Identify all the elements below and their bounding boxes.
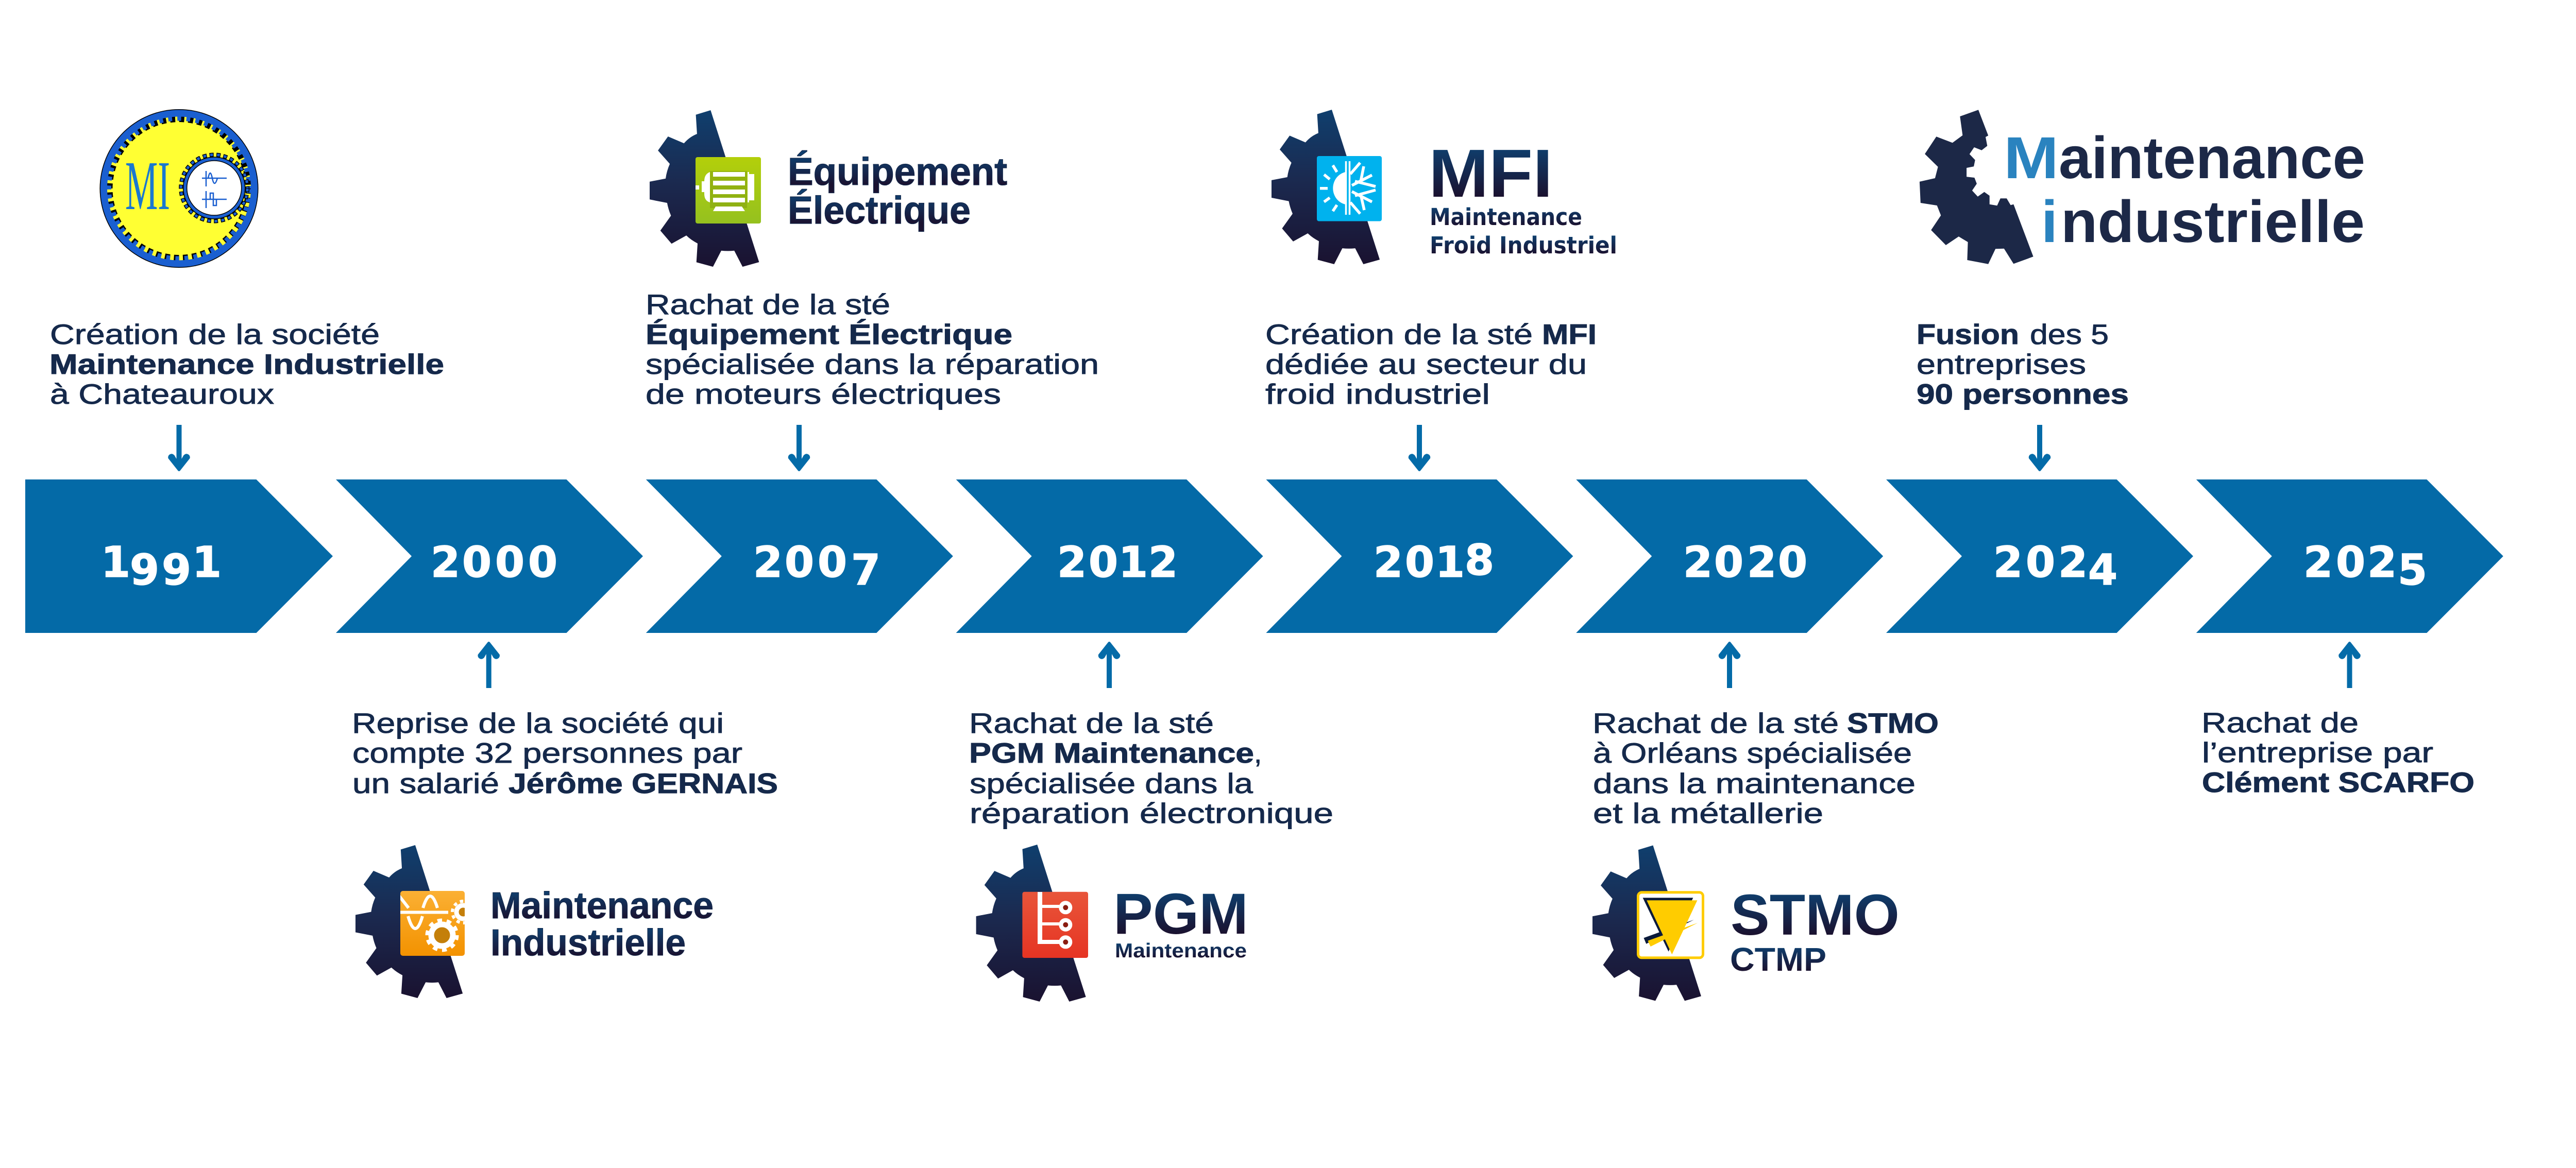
logo text: Électrique bbox=[788, 188, 971, 232]
logo text: M bbox=[2004, 125, 2059, 191]
text: 2000 bbox=[352, 707, 778, 799]
logo text: CTMP bbox=[1730, 941, 1826, 978]
text: 2000: Jérôme GERNAIS bbox=[509, 767, 778, 799]
logo text: Industrielle bbox=[490, 922, 686, 964]
icon: gear bbox=[355, 845, 463, 998]
text: 2007: Rachat de la sté bbox=[646, 288, 890, 320]
text: 2025: Rachat de bbox=[2201, 707, 2359, 738]
logo text: Maintenance bbox=[1115, 940, 1247, 962]
text: 2025: Clément SCARFO bbox=[2202, 766, 2475, 798]
chevron: 2007 bbox=[646, 479, 953, 633]
arrow: 2024 bbox=[2029, 425, 2050, 471]
text: 2000: Reprise de la société qui bbox=[352, 707, 724, 739]
text: 2012 bbox=[969, 707, 1333, 829]
logo text: Équipement bbox=[788, 150, 1007, 193]
icon: circuit bbox=[1022, 892, 1088, 958]
arrow: 2020 bbox=[1719, 642, 1740, 688]
text: 2020: Rachat de la sté bbox=[1592, 707, 1839, 739]
logo: Équipement Électrique bbox=[650, 110, 1007, 267]
logo text bbox=[788, 150, 1007, 232]
text: 2007 bbox=[646, 288, 1099, 410]
text: 2024: des 5 bbox=[2030, 318, 2109, 350]
text: 1991 bbox=[49, 318, 444, 410]
arrow: 2025 bbox=[2338, 642, 2361, 688]
chevron: 2020 bbox=[1576, 479, 1883, 633]
text: 2020: STMO bbox=[1847, 707, 1939, 739]
text: 2012: réparation électronique bbox=[970, 797, 1333, 829]
icon: sun and snowflake bbox=[1317, 156, 1382, 221]
chevron: 2007: 2007 bbox=[753, 538, 880, 595]
logo text: i bbox=[2041, 189, 2058, 255]
chevron: 1991: 1991 bbox=[101, 538, 222, 595]
logo text bbox=[1730, 883, 1900, 978]
text: 2000: un salarié bbox=[352, 767, 499, 799]
arrow: 2012 bbox=[1098, 642, 1120, 688]
text: 2024: Fusion bbox=[1917, 318, 2019, 350]
text: 2024: 90 personnes bbox=[1917, 378, 2129, 410]
text: 1991: à Chateauroux bbox=[50, 378, 274, 410]
logo text: ndustrielle bbox=[2061, 189, 2365, 255]
timeline chevrons bbox=[25, 479, 2503, 633]
text: 2024 bbox=[1917, 318, 2129, 410]
icon: yellow triangle bbox=[1638, 892, 1703, 958]
text: 2000: compte 32 personnes par bbox=[352, 737, 742, 769]
arrow: 1991 bbox=[168, 425, 190, 471]
text: 2007: de moteurs électriques bbox=[646, 378, 1001, 410]
logo text bbox=[1429, 135, 1617, 259]
icon: gear bbox=[976, 845, 1086, 1002]
text: 2012: , bbox=[1254, 737, 1262, 769]
logo text: Froid Industriel bbox=[1430, 232, 1617, 259]
text: 1991: Maintenance Industrielle bbox=[49, 348, 444, 380]
chevron: 2025 bbox=[2196, 479, 2503, 633]
text: 2018: Création de la sté bbox=[1265, 318, 1533, 350]
arrow: 2018 bbox=[1409, 425, 1430, 471]
chevron: 2012 bbox=[956, 479, 1263, 633]
chevron: 2018: 2018 bbox=[1374, 536, 1494, 587]
logo: PGM Maintenance bbox=[976, 845, 1248, 1002]
text: 2018: dédiée au secteur du bbox=[1265, 348, 1587, 380]
text: 2025 bbox=[2201, 707, 2475, 798]
icon: electric motor bbox=[696, 157, 761, 224]
text: 2007: Équipement Électrique bbox=[646, 318, 1012, 350]
icon: waves and cogs bbox=[400, 891, 465, 956]
text: 2020 bbox=[1592, 707, 1939, 829]
chevron: 2020: 2020 bbox=[1683, 538, 1807, 587]
logo: MI 1991 round gear bbox=[100, 109, 259, 268]
chevron: 2018 bbox=[1266, 479, 1573, 633]
text: 2012: Rachat de la sté bbox=[969, 707, 1214, 739]
text: 2018: MFI bbox=[1542, 318, 1597, 350]
logo: STMO CTMP bbox=[1592, 846, 1900, 1001]
icon: gear bbox=[650, 110, 759, 267]
text: 1991: Création de la société bbox=[50, 318, 380, 350]
logo text bbox=[2004, 125, 2365, 255]
text: 2012: PGM Maintenance bbox=[969, 737, 1254, 769]
logo text: Maintenance bbox=[1430, 203, 1582, 231]
logo text: MFI bbox=[1429, 135, 1553, 211]
chevron: 2000 bbox=[336, 479, 643, 633]
logo text: Maintenance bbox=[490, 885, 714, 926]
icon: gear bbox=[1272, 110, 1380, 264]
logo text: aintenance bbox=[2059, 125, 2365, 191]
logo: MFI bbox=[1272, 110, 1617, 264]
chevron: 1991 bbox=[25, 479, 333, 633]
chevron: 2000: 2000 bbox=[431, 538, 557, 587]
logo: MI 1991 round gear: MI bbox=[125, 147, 170, 225]
text: 2018: froid industriel bbox=[1265, 378, 1490, 410]
text: 2020: et la métallerie bbox=[1593, 797, 1823, 829]
text: 2024: entreprises bbox=[1917, 348, 2086, 380]
text: 2020: dans la maintenance bbox=[1593, 767, 1916, 799]
chevron: 2025: 2025 bbox=[2303, 538, 2427, 595]
arrow: 2007 bbox=[788, 425, 810, 471]
text: 2025: l’entreprise par bbox=[2202, 736, 2433, 768]
icon: gear with cut-outs bbox=[1920, 110, 2033, 264]
chevron: 2012: 2012 bbox=[1057, 538, 1178, 587]
arrow: 2000 bbox=[478, 642, 500, 688]
icon: gear bbox=[1592, 846, 1701, 1001]
logo text bbox=[490, 885, 714, 964]
chevron: 2024 bbox=[1886, 479, 2193, 633]
chevron: 2024: 2024 bbox=[1993, 538, 2117, 595]
text: 2007: spécialisée dans la réparation bbox=[646, 348, 1099, 380]
logo: Maintenance Industrielle 2000 bbox=[355, 845, 714, 998]
text: 2018 bbox=[1265, 318, 1597, 410]
text: 2012: spécialisée dans la bbox=[970, 767, 1253, 799]
logo text: PGM bbox=[1113, 882, 1248, 946]
logo: Maintenance Industrielle (merged) bbox=[1920, 110, 2365, 264]
logo text: STMO bbox=[1731, 883, 1900, 947]
text: 2020: à Orléans spécialisée bbox=[1593, 737, 1912, 769]
